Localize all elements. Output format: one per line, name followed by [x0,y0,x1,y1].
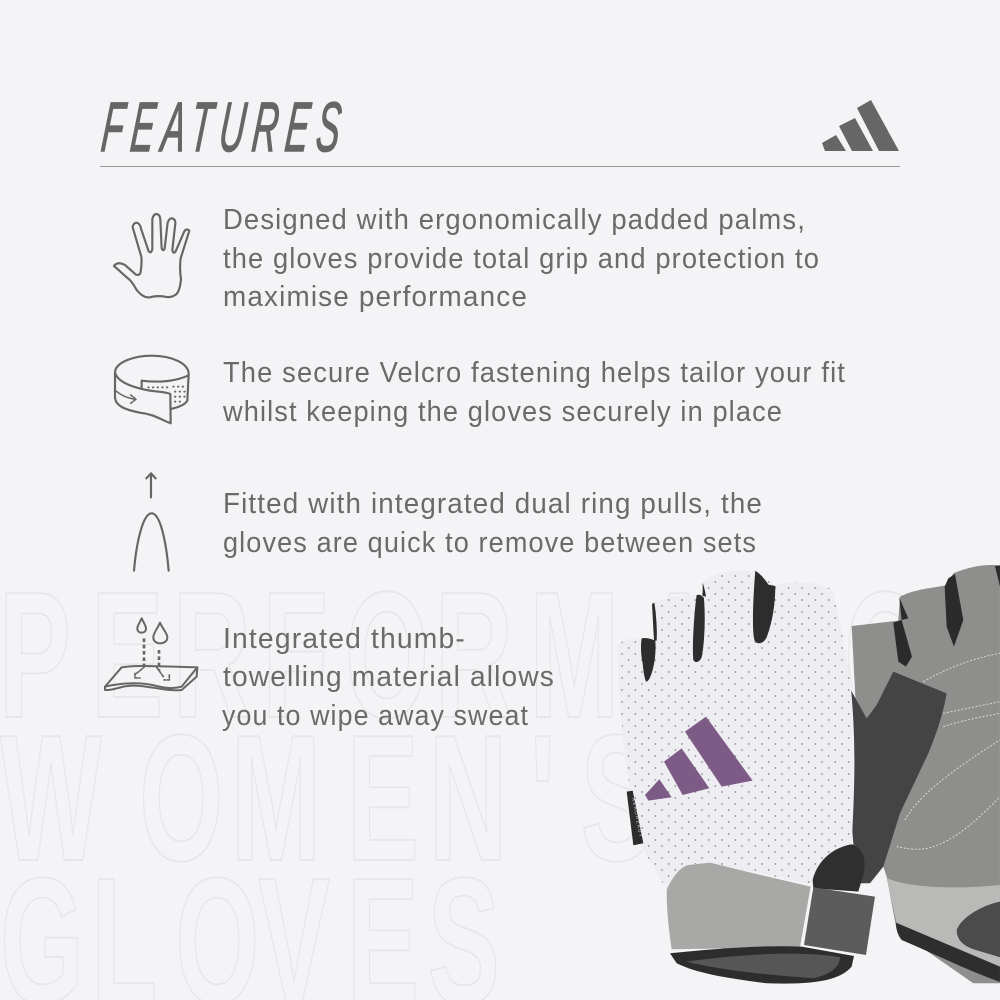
aeroready tag: AEROREADY [631,798,643,837]
product photo: pair of gloves [617,565,1000,984]
velcro strap [804,887,875,955]
feature text 2 [222,357,846,428]
feature text 2: whilst keeping the gloves securely in place [222,396,783,428]
feature text 1: maximise performance [223,281,528,313]
front glove mesh [617,571,854,890]
background outlined words: PERFORMANCE [0,556,1000,756]
pull tab [813,844,865,892]
feature text 1 [223,204,820,313]
back glove palm [852,565,1000,983]
feature text 3: gloves are quick to remove between sets [223,527,757,559]
adidas logo [822,100,899,151]
background outlined words: WOMEN'S [0,699,653,899]
icon: hand [114,214,189,297]
feature text 1: the gloves provide total grip and protection to [223,243,820,275]
three stripes [645,717,753,801]
feature text 4: you to wipe away sweat [222,700,529,732]
feature text 1: Designed with ergonomically padded palms, [223,204,806,236]
icon: towelling with drops [105,618,197,690]
back glove thumb [848,672,947,883]
feature text 4: Integrated thumb- [223,623,466,655]
feature text 3 [223,488,763,559]
icon: ring pull arrow [134,473,169,571]
aeroready tag [627,791,643,845]
title: FEATURES [98,88,345,166]
wrist underside [670,946,854,984]
feature text 2: The secure Velcro fastening helps tailor your fit [223,357,846,389]
icon: velcro band [115,356,189,423]
feature text 4 [222,623,555,732]
wrist cuff [667,863,811,949]
finger gaps [641,571,775,682]
background outlined words [0,556,1000,1000]
feature text 3: Fitted with integrated dual ring pulls, the [223,488,763,520]
feature text 4: towelling material allows [223,661,555,693]
